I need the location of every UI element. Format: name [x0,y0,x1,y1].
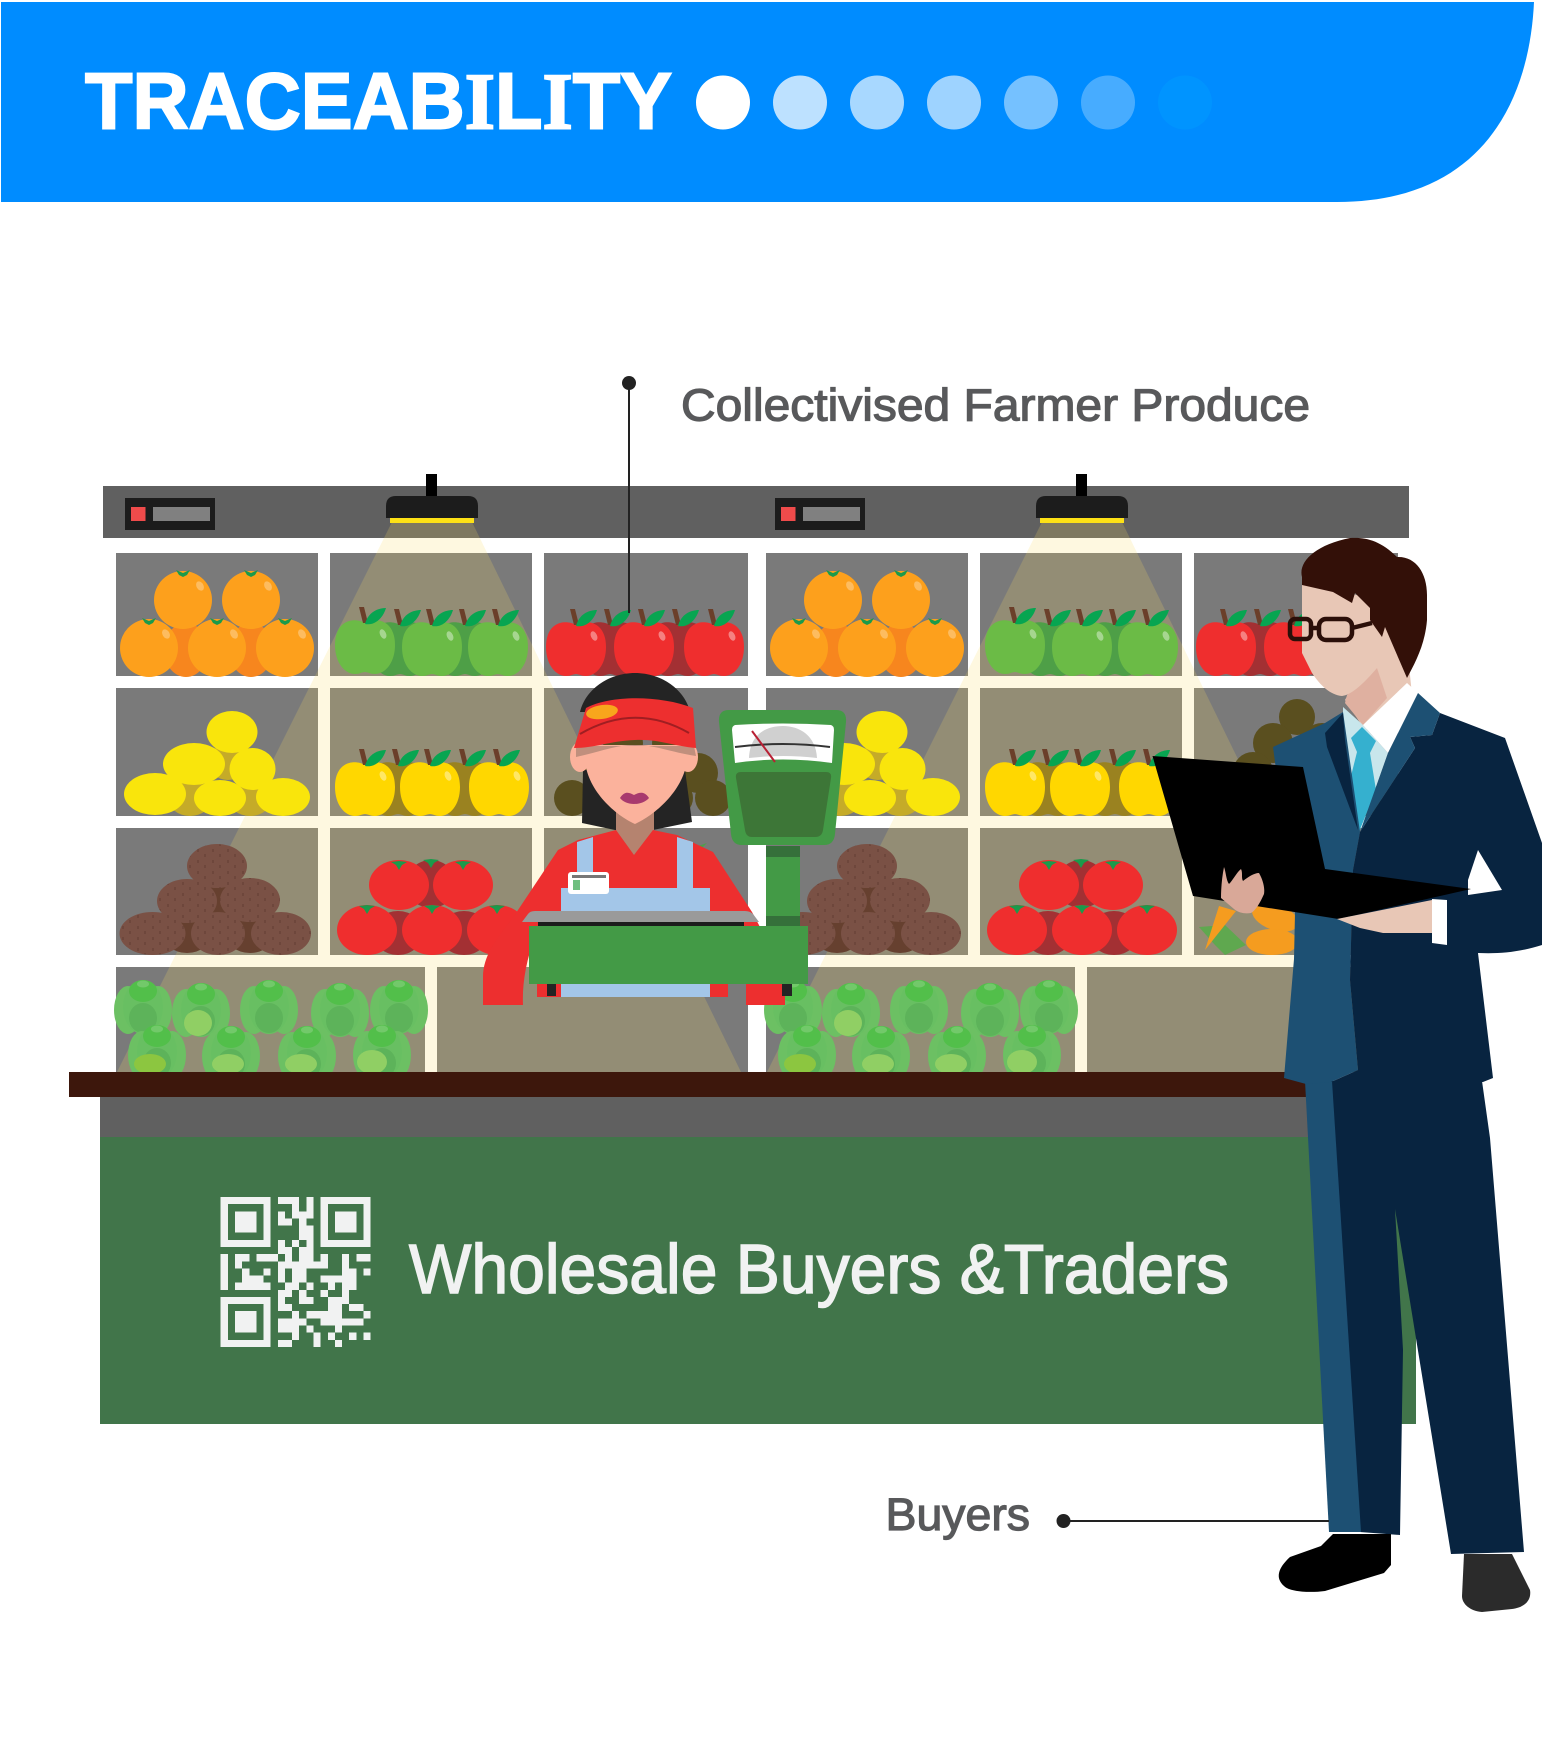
shelf unit: left [114,474,748,1080]
scale head [719,710,846,845]
hair [1301,538,1427,678]
laptop [1152,756,1471,919]
ears [570,742,698,772]
counter [69,1072,1416,1424]
shelf unit: right [764,474,1398,1080]
weighing scale [522,710,846,984]
trousers [1305,1081,1524,1554]
carrots [549,843,707,955]
tie [1350,727,1376,832]
buyer figure [1152,538,1542,1612]
potatoes [120,844,311,955]
left hand [1221,867,1264,913]
right lapel [1360,693,1440,832]
lamp [386,474,478,523]
jacket right and arm [1331,713,1542,1082]
header banner [1,2,1534,202]
name badge [568,872,609,894]
cap crown [580,673,690,712]
neck [616,812,654,855]
counter sign text: Wholesale Buyers &Traders [409,1230,1229,1308]
kiwi pile [554,699,731,816]
lips [620,793,649,804]
shelf display panel [125,498,215,530]
scale panel [736,772,831,837]
shirt [1343,707,1388,790]
red apples [546,609,744,676]
face [576,745,694,824]
yellow apples [335,749,529,816]
dial [732,724,834,763]
QR code [221,1197,371,1347]
tomatoes [337,859,527,955]
shoes [1279,1534,1391,1592]
oranges [120,570,314,677]
sleeve [483,910,535,1005]
right forearm [1337,900,1432,933]
shelf top bar [103,486,1409,538]
label: buyers: Buyers [886,1489,1030,1540]
inner lapel [1325,713,1358,830]
label: collectivised farmer produce: Collectivised Farmer Produce [681,380,1310,430]
cuff [1432,899,1447,945]
collar [1363,683,1418,753]
progress dots [696,76,1212,130]
leader line: buyers [1056,1514,1329,1528]
light cone [117,522,741,1072]
leader line: produce [622,376,636,613]
jacket left [1273,712,1360,1084]
shopkeeper [483,673,792,1005]
torso [518,830,760,927]
compartments [116,553,748,1072]
lower body [537,984,792,1005]
lemons [124,711,310,816]
scale stem [766,846,800,926]
neck and face [1345,655,1412,730]
arm gap [1468,850,1502,895]
hair back [582,770,692,830]
title: TRACEABILITY [85,56,672,146]
apron [561,837,710,912]
glasses [1290,619,1372,640]
scale base [529,926,808,984]
visor [574,698,696,748]
visor shadow [576,745,696,757]
scale platter [522,911,759,922]
green apples [335,607,528,676]
lettuces [114,980,428,1080]
